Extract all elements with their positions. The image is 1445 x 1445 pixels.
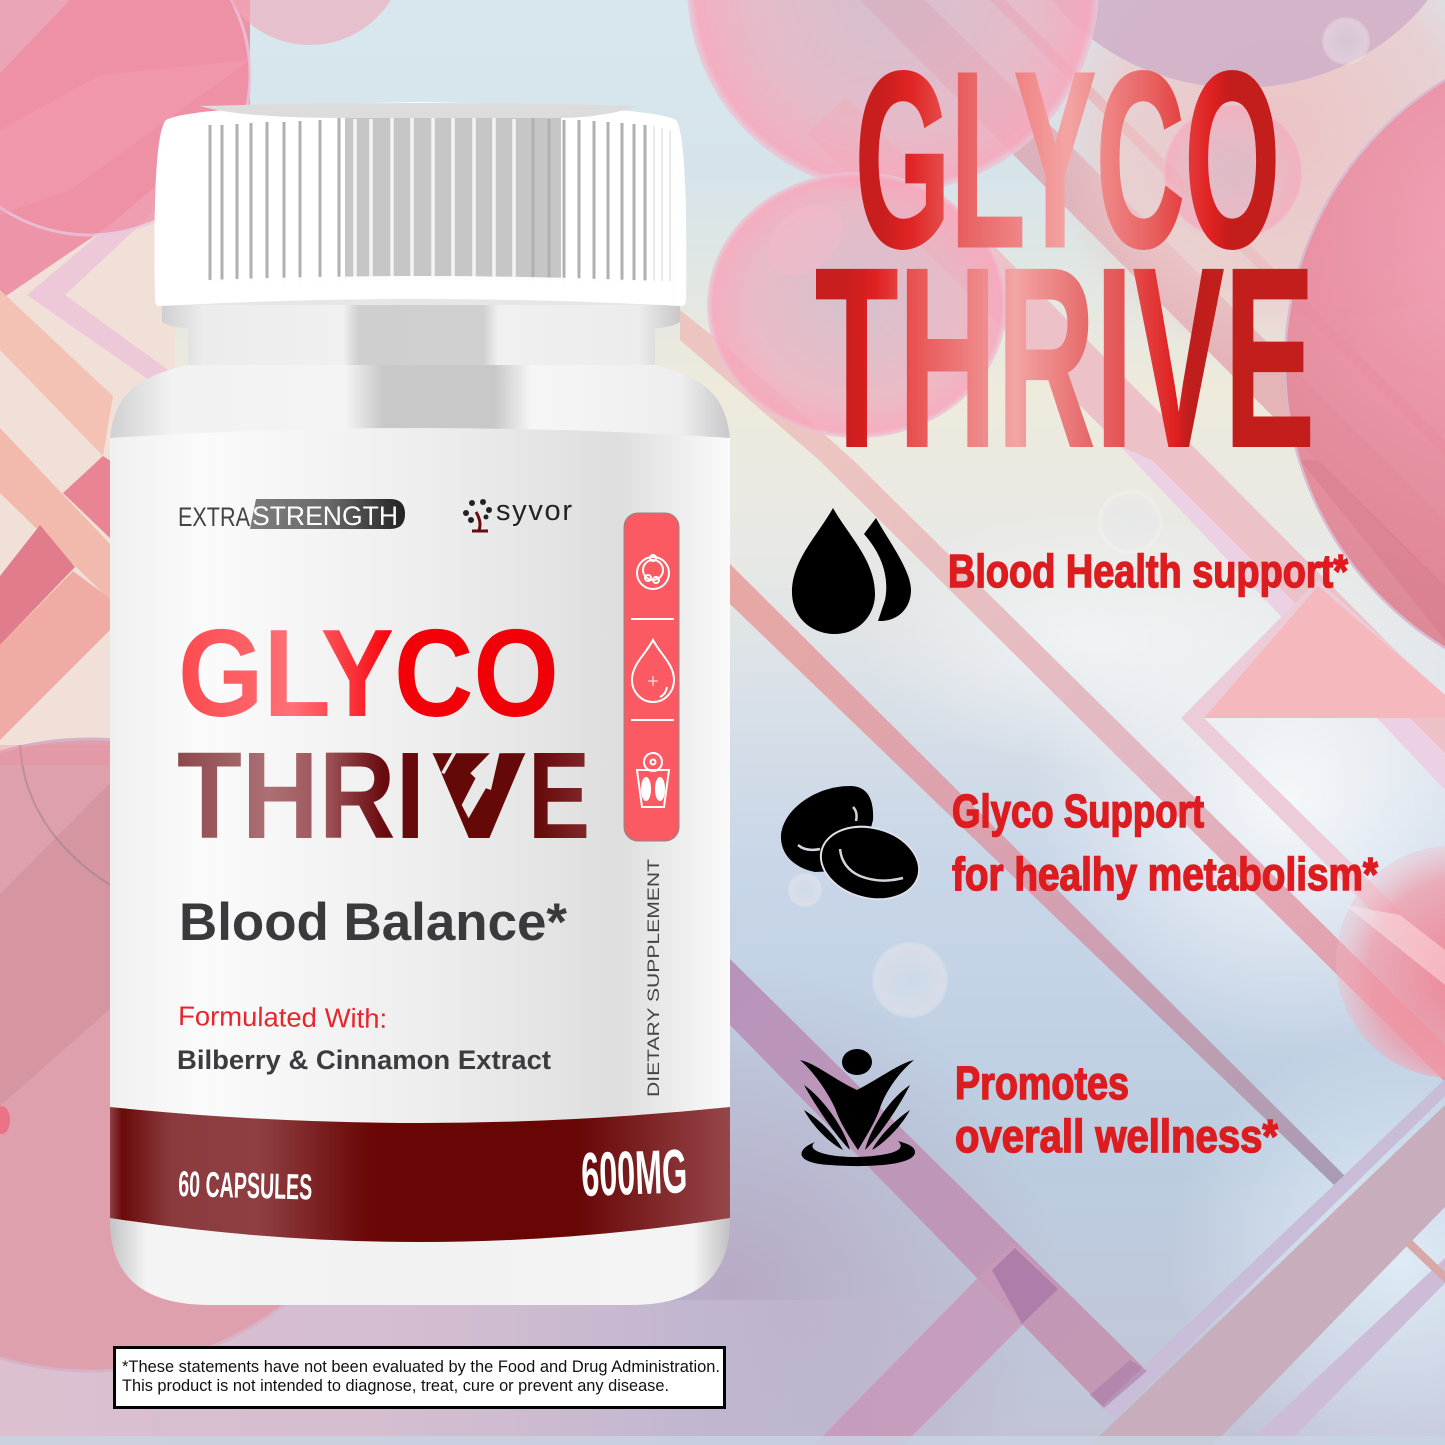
big left bubble [0,739,406,1371]
text: Promotes [955,1057,1129,1109]
diagonal bands right [680,310,1445,1082]
disclaimer: *These statements have not been evaluated by the Food and Drug Administration. [122,1358,720,1376]
syvor logo [463,495,572,531]
cap ribs [210,118,670,282]
formulated with: Formulated With: [178,1001,387,1034]
benefit 3: overall wellness* [955,1110,1278,1162]
top right bubbles [1040,0,1445,370]
benefit 3 [800,1049,1278,1166]
icon strip [624,513,679,841]
60 capsules: 60 CAPSULES [178,1163,313,1208]
bottle [110,102,730,1305]
cap [154,102,686,306]
blood balance: Blood Balance* [179,893,567,952]
bottle neck [162,305,680,365]
title [815,20,1315,501]
left side panel [0,200,175,770]
bottle body [110,440,730,1305]
600mg: 600MG [580,1137,688,1210]
icon: scale [637,753,669,807]
dietary supplement: DIETARY SUPPLEMENT [644,859,663,1097]
ingredients: Bilberry & Cinnamon Extract [177,1045,551,1075]
icon: wellness figure [800,1049,915,1166]
disclaimer [114,1348,724,1408]
thrive [177,728,590,865]
icon: blood drops [792,508,911,634]
extra strength badge [178,499,405,532]
text: Blood Health support* [948,545,1348,597]
glyco: GLYCO [178,605,559,743]
icon: drop [632,640,674,702]
thrive: V [432,728,526,865]
extra strength badge: EXTRA [178,502,250,532]
thrive: E [528,728,590,865]
icon: stomach [637,555,669,589]
text: Glyco Support [952,785,1204,837]
thrive: THRI [177,728,425,865]
syvor logo: syvor [496,495,572,527]
benefit 2: for healhy metabolism* [952,848,1378,900]
bottle shoulder [110,365,730,445]
disclaimer: This product is not intended to diagnose, treat, cure or prevent any disease. [122,1377,669,1395]
benefit 1 [792,508,1348,634]
benefit 2 [781,785,1378,910]
extra strength badge: STRENGTH [252,501,398,531]
label [110,428,730,1242]
icon: blood cells [781,786,927,910]
label band [110,1107,730,1242]
bubbles [0,0,250,235]
